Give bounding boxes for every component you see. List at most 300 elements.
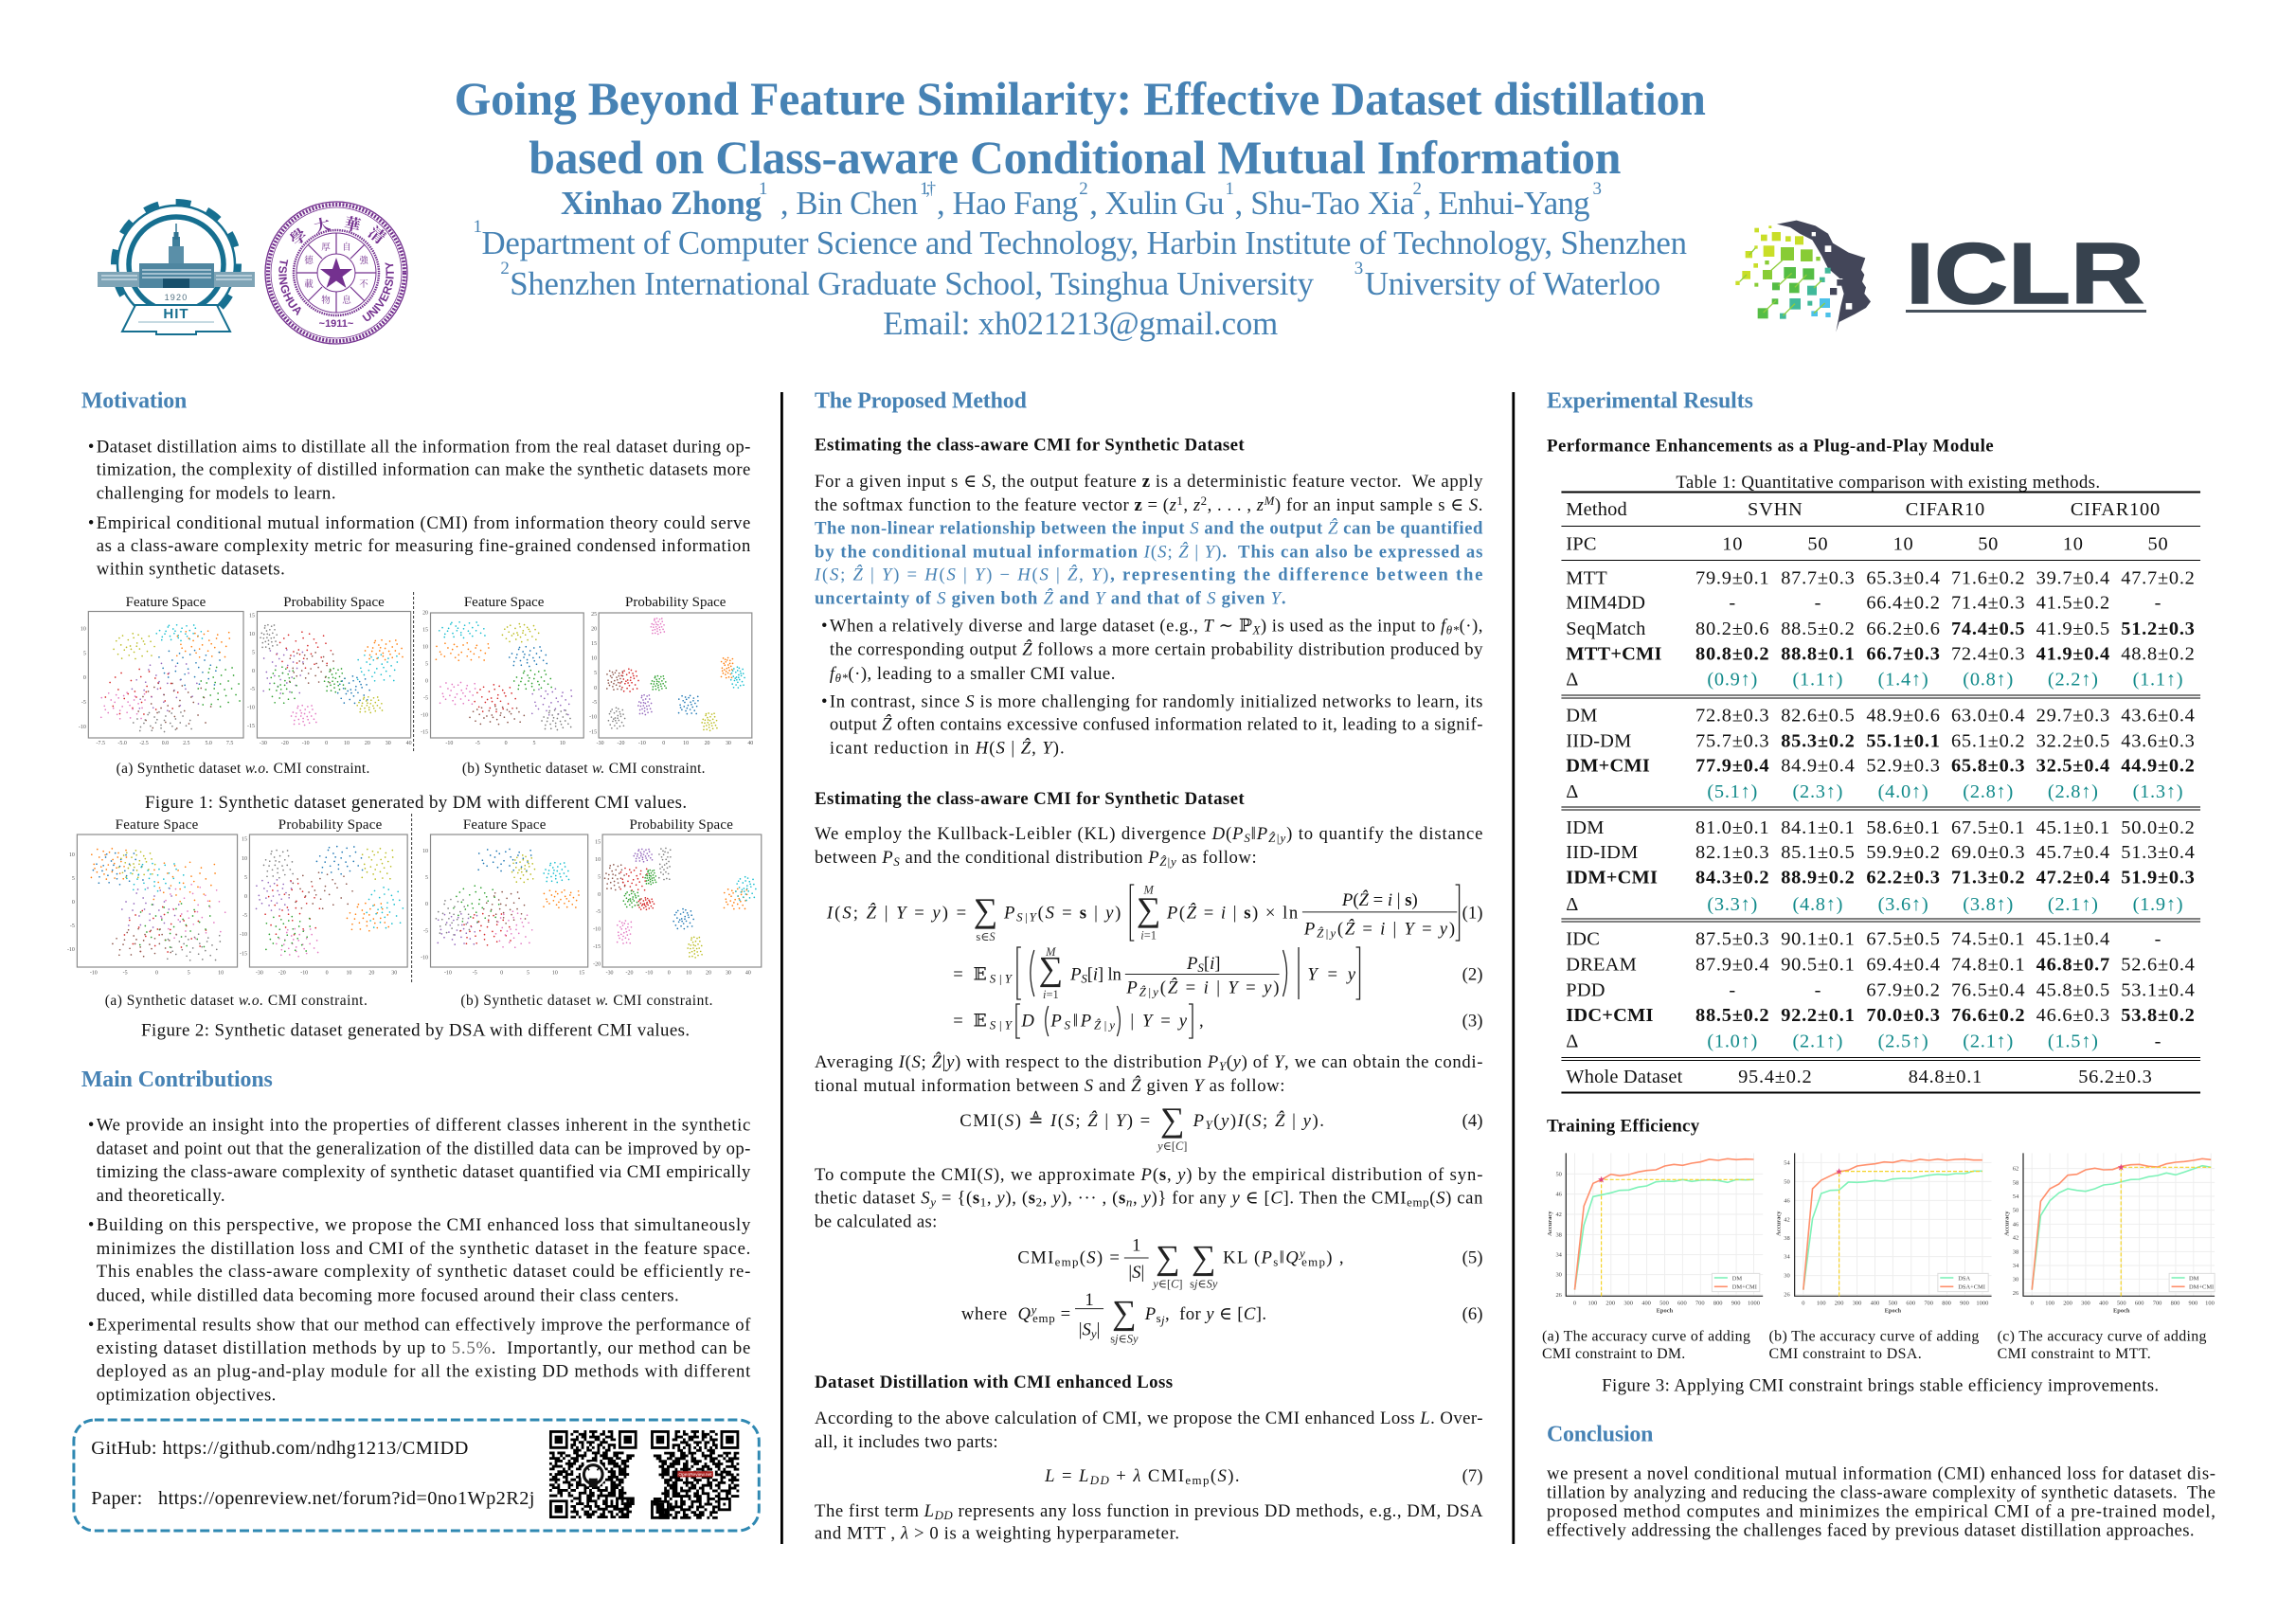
equation 3: S|Y bbox=[990, 1017, 1013, 1032]
text block: KL divergence: and the conditional distribution bbox=[900, 848, 1148, 868]
text block: definition: , bbox=[1183, 495, 1188, 515]
table row: IDC delta: (2.5↑) bbox=[1878, 1031, 1928, 1052]
chart: accuracy curve DSA: 54 bbox=[1784, 1159, 1790, 1166]
text block: empirical CMI: 2 bbox=[1036, 1194, 1042, 1209]
chart: figure 2a feature space: 0 bbox=[155, 970, 158, 977]
table row: header: SVHN bbox=[1748, 499, 1803, 520]
text block: conclusion bbox=[1547, 1464, 2215, 1541]
icon: pixelated head bbox=[1735, 221, 1871, 332]
table row: IDM delta: (3.6↑) bbox=[1878, 894, 1928, 915]
bullet text: motivation 1: timization, the complexity of distilled information can make the synthetic datasets more bbox=[97, 459, 750, 480]
bullet text: contribution 1: dataset and point out that the generalization of the distilled data can be improved by op- bbox=[97, 1139, 750, 1159]
subheading: training efficiency: Training Efficiency bbox=[1547, 1117, 1700, 1137]
table row: IDC delta: - bbox=[2155, 1031, 2161, 1052]
chart: accuracy curve DM bbox=[1547, 1153, 1763, 1314]
table row: IDC+CMI: 76.6±0.2 bbox=[1951, 1005, 2025, 1026]
chart: accuracy curve DM: 400 bbox=[1641, 1300, 1651, 1306]
table row: DM+CMI: 44.9±0.2 bbox=[2121, 755, 2196, 777]
table row: DM+CMI: 32.5±0.4 bbox=[2036, 755, 2110, 777]
table row: IID-DM: 75.7±0.3 bbox=[1695, 730, 1769, 752]
table row: MTT+CMI: 80.8±0.2 bbox=[1695, 643, 1769, 665]
chart: figure 2b probability space: -20 bbox=[593, 961, 601, 967]
equation 2: S bbox=[1081, 972, 1087, 986]
logo: Tsinghua University: 息 bbox=[342, 295, 351, 306]
equation 5: emp bbox=[1055, 1255, 1078, 1269]
text block: empirical CMI: y), (s bbox=[996, 1188, 1035, 1208]
table row: whole dataset: 84.8±0.1 bbox=[1909, 1067, 1982, 1087]
text block: conclusion: we present a novel conditional mutual information (CMI) enhanced loss for dataset dis- bbox=[1547, 1464, 2215, 1484]
table row: IDM delta: (1.9↑) bbox=[2133, 894, 2183, 915]
table row: DM: 43.6±0.4 bbox=[2121, 705, 2196, 727]
equation 7: + bbox=[1110, 1466, 1132, 1486]
equation 3: ‖ bbox=[1073, 1011, 1078, 1031]
bullet text: diverse dataset: is used as the input to f bbox=[1272, 617, 1445, 637]
chart: accuracy curve MTT: 900 bbox=[2189, 1300, 2197, 1306]
text block: KL divergence: P bbox=[1256, 824, 1267, 844]
chart: accuracy curve MTT: 46 bbox=[2013, 1221, 2019, 1228]
chart: figure 2b feature space: 0 bbox=[500, 970, 503, 977]
table row: IDM delta: (2.1↑) bbox=[2048, 894, 2099, 915]
equation 3: S bbox=[1065, 1017, 1071, 1032]
table row: MTT delta bbox=[1566, 669, 2183, 691]
bullet text: contribution 3: Experimental results show that our method can effectively improve the performance of bbox=[97, 1315, 751, 1336]
chart: figure 1a feature space: -2.5 bbox=[139, 741, 149, 746]
chart: accuracy curve DM: 100 bbox=[1588, 1300, 1597, 1306]
table row: IDC delta: (2.1↑) bbox=[1963, 1031, 2014, 1052]
equation 5: y∈[C] bbox=[1151, 1277, 1183, 1290]
chart: accuracy curve DSA: 600 bbox=[1906, 1300, 1915, 1306]
text block: conclusion: tillation by analyzing and reducing the class-aware complexity of synthetic datasets. The bbox=[1547, 1483, 2215, 1503]
bullet text: contribution 3 bbox=[88, 1315, 751, 1405]
chart: accuracy curve DSA: 700 bbox=[1924, 1300, 1933, 1306]
chart: accuracy curve DM: 300 bbox=[1623, 1300, 1633, 1306]
heading: main contributions: Main Contributions bbox=[81, 1068, 273, 1092]
chart: figure 2a probability space: -15 bbox=[240, 951, 247, 957]
equation 7: ( bbox=[1211, 1466, 1216, 1486]
table row: SeqMatch: 51.2±0.3 bbox=[2121, 619, 2196, 639]
equation 5: S) = bbox=[1086, 1248, 1120, 1268]
chart: accuracy curve DSA: DSA bbox=[1958, 1275, 1970, 1283]
chart: accuracy curve MTT: 30 bbox=[2013, 1276, 2018, 1283]
text block: KL divergence: P bbox=[1147, 848, 1159, 868]
authors: 2 bbox=[1079, 179, 1088, 199]
equation 4: ( bbox=[1213, 1111, 1220, 1131]
bullet text: motivation 2: within synthetic datasets. bbox=[97, 560, 285, 580]
chart: figure 2a probability space: -5 bbox=[242, 913, 247, 919]
subheading: performance enhancements: Performance Enhancements as a Plug-and-Play Module bbox=[1547, 436, 1994, 457]
equation 5: Q bbox=[1285, 1248, 1299, 1268]
table row: IDM+CMI: 62.2±0.3 bbox=[1866, 867, 1941, 888]
table row: MTT delta: Δ bbox=[1566, 669, 1579, 691]
equation 2: S|Y bbox=[990, 972, 1013, 986]
table row: IID-DM: IID-DM bbox=[1566, 730, 1631, 752]
table row: IDC: - bbox=[2155, 928, 2161, 950]
heading: conclusion: Conclusion bbox=[1547, 1423, 1653, 1447]
table row: IDM: 58.6±0.1 bbox=[1866, 817, 1941, 838]
equation 4: ∑ bbox=[1160, 1101, 1185, 1139]
bullet text: challenging dataset: output Ẑ often contains excessive confused information related to it, leading to a signif- bbox=[830, 713, 1482, 735]
bullet text: diverse dataset: When a relatively diverse and large dataset (e.g., T ∼ ℙ bbox=[830, 617, 1252, 637]
table row: IDC+CMI: 53.8±0.2 bbox=[2121, 1005, 2196, 1026]
chart: figure 1a feature space: 0.0 bbox=[162, 741, 169, 746]
equation 2: [ bbox=[1204, 954, 1210, 974]
chart: figure 2a probability space: 15 bbox=[242, 836, 247, 843]
chart: figure 1b feature space: -15 bbox=[421, 729, 428, 735]
table caption: Table 1: Quantitative comparison with existing methods. bbox=[1676, 473, 2100, 493]
equation 3: = 𝔼 bbox=[953, 1011, 987, 1031]
equation 2: i=1 bbox=[1043, 988, 1059, 1001]
chart: accuracy curve DM: 42 bbox=[1555, 1211, 1562, 1218]
chart: figure 1a feature space: -5 bbox=[81, 700, 86, 706]
table row: IDC: IDC bbox=[1566, 928, 1600, 950]
table row: IDC delta: Δ bbox=[1566, 1031, 1579, 1052]
text block: empirical CMI: thetic dataset S bbox=[815, 1188, 930, 1208]
table row: MTT delta: (0.8↑) bbox=[1963, 669, 2014, 691]
logo: Tsinghua University: UNIVERSITY bbox=[362, 262, 394, 321]
table row: header: Method bbox=[1566, 499, 1627, 520]
affiliations: Department of Computer Science and Technology, Harbin Institute of Technology, Shenzhen bbox=[481, 224, 1687, 261]
chart: figure 1b feature space: 5 bbox=[532, 741, 535, 746]
chart: figure 2a probability space: 10 bbox=[346, 970, 351, 977]
table row: DREAM: 52.6±0.4 bbox=[2121, 954, 2196, 976]
chart: accuracy curve DSA: 300 bbox=[1853, 1300, 1861, 1306]
chart: figure 2b feature space bbox=[421, 834, 588, 977]
equation 4: Y bbox=[1206, 1118, 1214, 1132]
chart: accuracy curve DSA: 50 bbox=[1784, 1178, 1790, 1185]
equation 7: λ CMI bbox=[1133, 1466, 1184, 1486]
authors: , Hao Fang bbox=[937, 185, 1078, 222]
equation 2: i] bbox=[1210, 954, 1221, 974]
chart: accuracy curve DM: 700 bbox=[1695, 1300, 1705, 1306]
chart: figure 2a feature space: 5 bbox=[188, 970, 190, 977]
table row: header: CIFAR10 bbox=[1906, 499, 1985, 520]
figure 2: scatter plots: Probability Space bbox=[278, 817, 383, 833]
text block: KL divergence: Ẑ|y bbox=[1268, 831, 1286, 845]
table row: IDM bbox=[1566, 817, 2196, 838]
text block: definition: I(S; Ẑ | Y) = H(S | Y) − H(S | Ẑ, Y), representing the difference between the bbox=[814, 564, 1482, 585]
chart: accuracy curve MTT: 300 bbox=[2081, 1300, 2090, 1306]
wordmark: ICLR bbox=[1906, 226, 2144, 322]
chart: figure 1a probability space: 20 bbox=[365, 741, 370, 746]
table row: IDC+CMI: IDC+CMI bbox=[1566, 1005, 1654, 1026]
chart: figure 2b probability space: 15 bbox=[595, 840, 601, 846]
equation 3: (3) bbox=[1462, 1011, 1482, 1031]
table row: IDC delta: (1.5↑) bbox=[2048, 1031, 2099, 1052]
table row: IDM+CMI: IDM+CMI bbox=[1566, 867, 1658, 888]
chart: figure 1a feature space: -7.5 bbox=[97, 741, 105, 746]
text block: conclusion: effectively addressing the challenges faced by previous dataset distillation approaches. bbox=[1547, 1521, 2195, 1541]
equation 5: ‖ bbox=[1280, 1248, 1284, 1268]
table row: MTT delta: (1.4↑) bbox=[1878, 669, 1928, 691]
equation 1: (1) bbox=[1462, 903, 1482, 923]
table row: IDC: 87.5±0.3 bbox=[1695, 928, 1769, 950]
text block: KL divergence: ) bbox=[1286, 824, 1292, 844]
chart: figure 1a feature space: -10 bbox=[79, 725, 86, 730]
chart: accuracy curve DSA: 400 bbox=[1871, 1300, 1879, 1306]
authors: 1 bbox=[1226, 179, 1234, 199]
table row: PDD: PDD bbox=[1566, 979, 1605, 1001]
table row: MIM4DD bbox=[1566, 592, 2161, 614]
equation 2 bbox=[953, 945, 1482, 1001]
subheading: CMI enhanced loss: Dataset Distillation with CMI enhanced Loss bbox=[815, 1373, 1173, 1392]
chart: figure 2b feature space: -10 bbox=[444, 970, 452, 977]
equation 2: [ bbox=[1087, 965, 1093, 985]
text block: averaging bbox=[815, 1051, 1482, 1096]
subcaptions: figure 3 bbox=[1542, 1328, 2207, 1362]
subcaptions: figure 3: (a) The accuracy curve of adding bbox=[1542, 1328, 1750, 1344]
table row: IID-IDM: 82.1±0.3 bbox=[1695, 842, 1769, 863]
text block: empirical CMI: S) can bbox=[1436, 1188, 1482, 1208]
affiliations: 3 bbox=[1354, 259, 1363, 278]
bullet text: contribution 2: duced, while distilled data becoming more focused around their class centers. bbox=[97, 1285, 679, 1305]
chart: accuracy curve MTT: 50 bbox=[2013, 1208, 2018, 1214]
table row: IPC bbox=[1566, 533, 2168, 555]
chart: accuracy curve MTT: 34 bbox=[2013, 1263, 2019, 1269]
chart: figure 1b probability space: 5 bbox=[594, 671, 597, 676]
equation 1: P bbox=[1003, 903, 1014, 923]
table row: whole dataset bbox=[1566, 1067, 2153, 1087]
chart: accuracy curve DSA: 1000 bbox=[1976, 1300, 1988, 1306]
text block: KL divergence: between P bbox=[815, 848, 893, 868]
equation 2: P bbox=[1186, 954, 1197, 974]
text block: empirical CMI: 1 bbox=[980, 1194, 986, 1209]
chart: figure 2a feature space: 5 bbox=[72, 876, 75, 882]
bullet text: contribution 2: Building on this perspective, we propose the CMI enhanced loss that simultaneously bbox=[97, 1215, 751, 1235]
chart: accuracy curve MTT: 54 bbox=[2013, 1193, 2019, 1200]
equation 6: 1 bbox=[1085, 1290, 1094, 1310]
equation 3 bbox=[953, 1004, 1482, 1038]
table row: DM: DM bbox=[1566, 705, 1598, 727]
table row: DM: 29.7±0.3 bbox=[2036, 705, 2110, 727]
chart: figure 2b feature space: 10 bbox=[552, 970, 558, 977]
chart: accuracy curve DSA: Accuracy bbox=[1775, 1211, 1782, 1236]
chart: figure 1b probability space: -5 bbox=[592, 700, 597, 706]
text block: averaging: ( bbox=[1227, 1052, 1232, 1072]
bullet text: contribution 1: • bbox=[88, 1115, 94, 1135]
figure 1: scatter plots: (a) Synthetic dataset w.o. CMI constraint. bbox=[117, 761, 369, 777]
table row: IDM delta: (3.8↑) bbox=[1963, 894, 2014, 915]
table: quantitative comparison bbox=[1561, 493, 2200, 1093]
bullet text: contribution 3: • bbox=[88, 1315, 94, 1336]
table row: IPC: IPC bbox=[1566, 533, 1597, 555]
equation 3: P bbox=[1080, 1011, 1091, 1031]
chart: figure 2b probability space: 10 bbox=[686, 970, 691, 977]
text block: empirical CMI: ( bbox=[1429, 1188, 1435, 1208]
equation 1: P(Ẑ = i | s) bbox=[1341, 889, 1418, 910]
table row: IID-DM: 55.1±0.1 bbox=[1866, 730, 1941, 752]
chart: accuracy curve MTT: 62 bbox=[2013, 1166, 2018, 1173]
bullet text: diverse dataset: the corresponding output Ẑ follows a more certain probability distribution produced by bbox=[830, 639, 1483, 660]
chart: figure 1a probability space: -15 bbox=[247, 724, 255, 729]
chart: accuracy curve DM: 50 bbox=[1555, 1171, 1562, 1177]
bullet text: contribution 1: timizing the class-aware complexity of synthetic dataset quantified via CMI empirically bbox=[97, 1162, 751, 1182]
table row: IDC: 45.1±0.4 bbox=[2036, 928, 2110, 950]
logo: Tsinghua University: TSINGHUA bbox=[278, 260, 301, 316]
equation 6: emp bbox=[1032, 1311, 1055, 1325]
equation 5: sj∈Sy bbox=[1190, 1277, 1218, 1290]
subcaptions: figure 3: (c) The accuracy curve of adding bbox=[1998, 1328, 2207, 1344]
equation 1: S|Y bbox=[1016, 909, 1038, 924]
table row: DM: 82.6±0.5 bbox=[1781, 705, 1856, 727]
chart: accuracy curve DM: 800 bbox=[1713, 1300, 1723, 1306]
table row: MTT: MTT bbox=[1566, 567, 1607, 589]
subcaptions: figure 3: CMI constraint to DSA. bbox=[1769, 1346, 1922, 1362]
equation 1: I(S; Ẑ | Y = y) = bbox=[826, 902, 966, 923]
chart: figure 1b probability space: 20 bbox=[591, 626, 597, 633]
text block: empirical CMI bbox=[815, 1165, 1483, 1231]
chart: accuracy curve MTT: DM bbox=[2189, 1275, 2199, 1283]
equation 6: , bbox=[1165, 1304, 1170, 1324]
bullet text: motivation 2: as a class-aware complexity metric for measuring fine-grained condensed information bbox=[97, 536, 751, 556]
column divider 2 bbox=[1512, 392, 1515, 1544]
bullet text: diverse dataset: • bbox=[821, 617, 828, 637]
bullet text: diverse dataset: f bbox=[830, 664, 837, 684]
text block: definition: . . . , z bbox=[1217, 495, 1264, 515]
chart: accuracy curve DSA: 200 bbox=[1835, 1300, 1843, 1306]
table row: MIM4DD: MIM4DD bbox=[1566, 592, 1645, 614]
text block: definition: 2 bbox=[1201, 493, 1207, 508]
table row: MIM4DD: - bbox=[1815, 592, 1821, 614]
chart: figure 1b feature space: 20 bbox=[422, 610, 428, 616]
table row: IPC: 50 bbox=[1978, 533, 1999, 555]
chart: figure 2b probability space: 40 bbox=[745, 970, 751, 977]
text block: KL divergence: We employ the Kullback-Leibler (KL) divergence D(P bbox=[815, 824, 1243, 844]
table row: IID-IDM: 51.3±0.4 bbox=[2121, 842, 2196, 863]
subcaptions: figure 3: (b) The accuracy curve of adding bbox=[1769, 1328, 1979, 1344]
equation 2: M bbox=[1045, 945, 1056, 959]
chart: accuracy curve DSA: Epoch bbox=[1885, 1307, 1902, 1314]
title: Going Beyond Feature Similarity: Effective Dataset distillation bbox=[455, 73, 1706, 125]
equation 2: S bbox=[1197, 960, 1204, 975]
text block: enhanced loss: all, it includes two parts: bbox=[815, 1432, 998, 1452]
equation 2: i] ln bbox=[1093, 965, 1121, 985]
chart: accuracy curve MTT: 100 bbox=[2045, 1300, 2054, 1306]
table row: IDM+CMI: 47.2±0.4 bbox=[2036, 867, 2110, 888]
text block: definition: by the conditional mutual information I(S; Ẑ | Y). This can also be expressed as bbox=[815, 541, 1482, 562]
chart: figure 2b probability space: -5 bbox=[596, 909, 601, 915]
chart: accuracy curve DM: 30 bbox=[1555, 1272, 1562, 1279]
figure 1: scatter plots bbox=[79, 592, 753, 777]
table row: DM delta: (2.3↑) bbox=[1792, 781, 1843, 802]
chart: figure 1b feature space bbox=[421, 610, 583, 746]
table row: IID-IDM bbox=[1566, 842, 2196, 863]
chart: figure 1b feature space: 0 bbox=[505, 741, 508, 746]
chart: accuracy curve DSA: 100 bbox=[1817, 1300, 1826, 1306]
table row: MIM4DD: 41.5±0.2 bbox=[2036, 592, 2110, 614]
chart: figure 1b feature space: 10 bbox=[560, 741, 565, 746]
table row: PDD: 76.5±0.4 bbox=[1951, 979, 2025, 1001]
authors: , Bin Chen bbox=[780, 185, 918, 222]
text block: KL divergence: as follow: bbox=[1176, 848, 1257, 868]
logo: Tsinghua University: 不 bbox=[359, 279, 368, 290]
QR code: github bbox=[549, 1430, 637, 1518]
table row: DM+CMI: 77.9±0.4 bbox=[1695, 755, 1769, 777]
text block: averaging: tional mutual information between S and Ẑ given Y as follow: bbox=[815, 1075, 1285, 1096]
table row: IDC bbox=[1566, 928, 2161, 950]
equation 4: y)I(S; Ẑ | y). bbox=[1221, 1111, 1324, 1131]
text block: definition: ) bbox=[1275, 495, 1281, 515]
logo: Tsinghua University: 華 bbox=[342, 213, 363, 236]
equation 6: s bbox=[1157, 1311, 1161, 1325]
table row: DM: 72.8±0.3 bbox=[1695, 705, 1769, 727]
table row: IDC+CMI: 70.0±0.3 bbox=[1866, 1005, 1941, 1026]
bullet text: contribution 2: minimizes the distillation loss and CMI of the synthetic dataset in the feature space. bbox=[97, 1239, 750, 1259]
bullet text: challenging dataset: • bbox=[821, 691, 828, 711]
equation 1: S = s | y) bbox=[1046, 903, 1121, 923]
table row: MTT: 71.6±0.2 bbox=[1951, 567, 2025, 589]
chart: figure 2a feature space: -10 bbox=[67, 947, 75, 953]
table row: IDM: 45.1±0.1 bbox=[2036, 817, 2110, 838]
bullet text: diverse dataset: (·), bbox=[848, 664, 871, 684]
table row: IPC: 50 bbox=[1807, 533, 1828, 555]
table row: DM bbox=[1566, 705, 2196, 727]
chart: figure 2a feature space: -5 bbox=[70, 924, 75, 929]
chart: accuracy curve DSA: 42 bbox=[1784, 1216, 1790, 1223]
chart: figure 1a feature space: 5 bbox=[83, 651, 86, 656]
table row: IID-IDM: 69.0±0.3 bbox=[1951, 842, 2025, 863]
chart: accuracy curve DM: Epoch bbox=[1657, 1307, 1674, 1314]
table row: DM delta bbox=[1566, 781, 2183, 802]
text block: KL divergence bbox=[815, 824, 1482, 869]
chart: figure 1b probability space: 0 bbox=[662, 741, 665, 746]
logo: ICLR bbox=[1735, 221, 2146, 332]
bullet text: contribution 1 bbox=[88, 1115, 751, 1206]
table row: IPC: 50 bbox=[2148, 533, 2168, 555]
table row: SeqMatch: 74.4±0.5 bbox=[1951, 619, 2025, 639]
table row: MTT: 39.7±0.4 bbox=[2036, 567, 2110, 589]
chart: figure 1b feature space: -5 bbox=[475, 741, 480, 746]
table row: DREAM: 87.9±0.4 bbox=[1695, 954, 1769, 976]
authors: , Shu-Tao Xia bbox=[1234, 185, 1415, 222]
text block: definition: , bbox=[1208, 495, 1211, 515]
table row: SeqMatch: 88.5±0.2 bbox=[1781, 619, 1856, 639]
chart: figure 1a feature space: 10 bbox=[81, 626, 86, 633]
table row: IDC+CMI: 92.2±0.1 bbox=[1781, 1005, 1856, 1026]
chart: figure 2b feature space: 5 bbox=[425, 875, 428, 881]
chart: figure 1b probability space: -15 bbox=[589, 729, 597, 735]
text block: definition: For a given input s ∈ S, the output feature z is a deterministic feature vector. We apply bbox=[815, 472, 1483, 492]
bullet text: diverse dataset: (·), bbox=[1460, 617, 1482, 637]
table row: IDM delta: Δ bbox=[1566, 894, 1579, 915]
chart: figure 1a feature space: -5.0 bbox=[117, 741, 127, 746]
text block: empirical CMI: y bbox=[928, 1194, 936, 1209]
logo: Harbin Institute of Technology: HIT bbox=[163, 306, 189, 322]
equation 6: |S bbox=[1079, 1319, 1091, 1340]
figure 1: scatter plots: Probability Space bbox=[625, 595, 726, 610]
chart: accuracy curve MTT: 400 bbox=[2099, 1300, 2108, 1306]
table row: DREAM: 69.4±0.4 bbox=[1866, 954, 1941, 976]
chart: figure 2b probability space: 10 bbox=[595, 857, 601, 863]
equation 4: P bbox=[1193, 1111, 1204, 1131]
equation 5: s bbox=[1273, 1255, 1278, 1269]
chart: accuracy curve MTT: 0 bbox=[2031, 1300, 2034, 1306]
chart: accuracy curve DM: 38 bbox=[1555, 1231, 1562, 1238]
chart: accuracy curve DM: 600 bbox=[1677, 1300, 1687, 1306]
table row: SeqMatch: SeqMatch bbox=[1566, 619, 1646, 639]
table row: MTT: 87.7±0.3 bbox=[1781, 567, 1856, 589]
equation 6 bbox=[961, 1290, 1482, 1346]
callout: links and QR codes bbox=[74, 1420, 759, 1531]
chart: figure 2a probability space: -20 bbox=[278, 970, 286, 977]
table row: IDC+CMI bbox=[1566, 1005, 2196, 1026]
table row: MTT+CMI bbox=[1566, 643, 2196, 665]
chart: figure 1a probability space bbox=[247, 612, 412, 746]
table row: SeqMatch bbox=[1566, 619, 2196, 639]
text block: empirical CMI: , bbox=[987, 1188, 992, 1208]
table row: IDM: 67.5±0.1 bbox=[1951, 817, 2025, 838]
equation 7: (7) bbox=[1462, 1466, 1482, 1486]
table row: IDM: 84.1±0.1 bbox=[1781, 817, 1856, 838]
